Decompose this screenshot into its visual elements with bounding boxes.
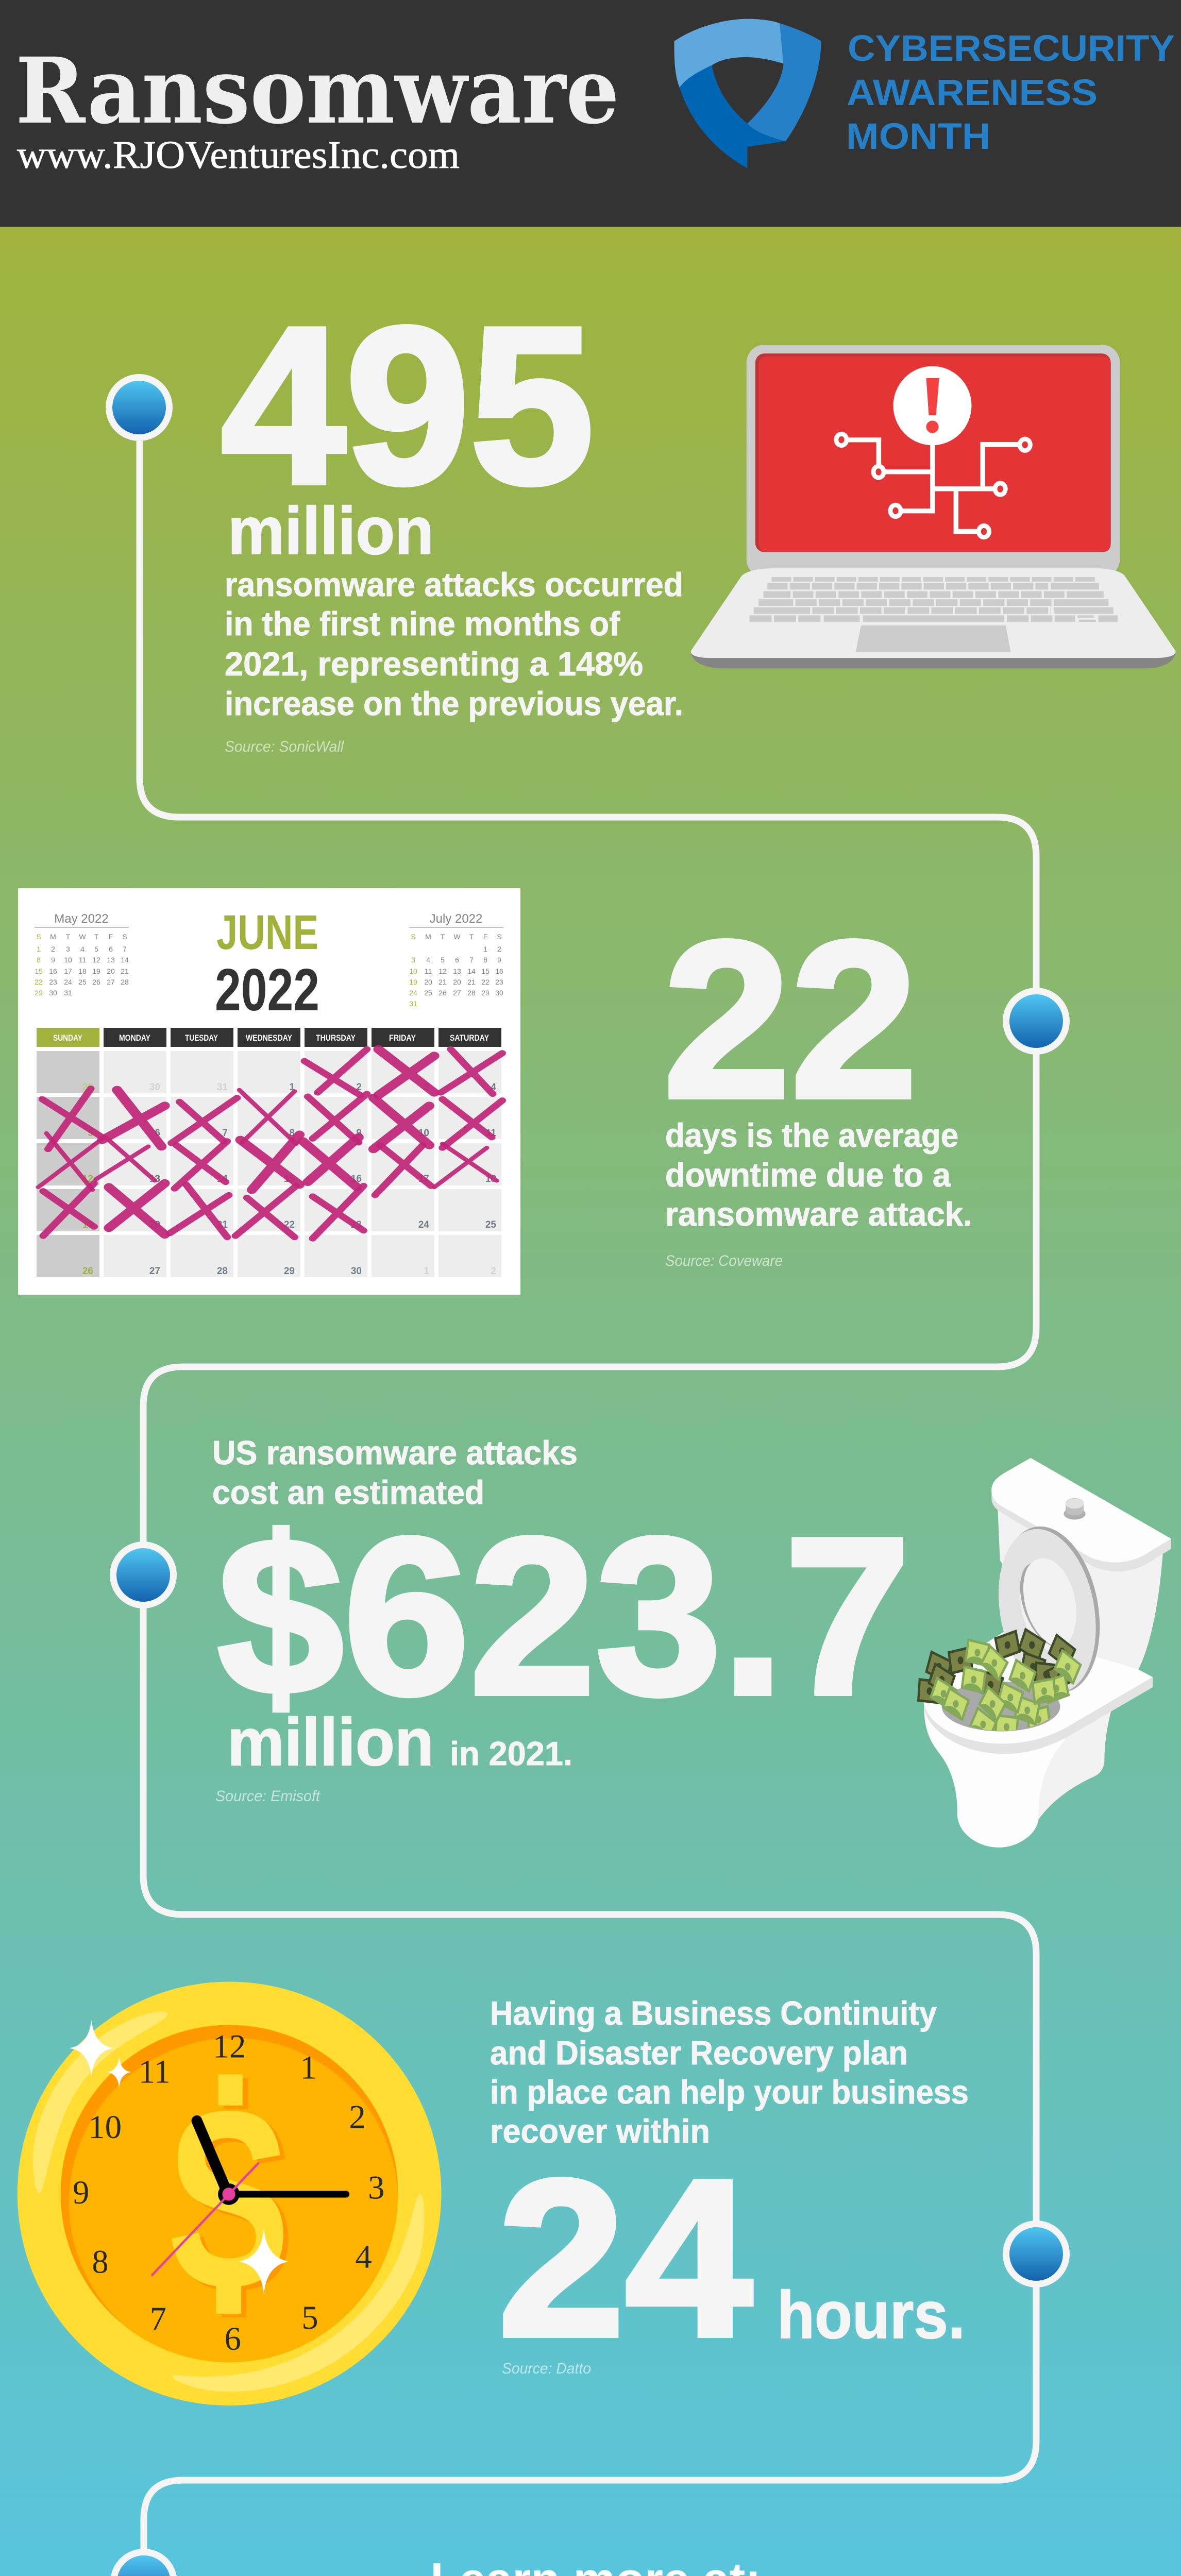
description text: downtime due to a — [665, 1156, 951, 1194]
mini calendar: May: 2 — [51, 945, 55, 953]
mini calendar: May: 12 — [92, 956, 100, 964]
day numbers: 17 — [418, 1174, 429, 1184]
day numbers: 30 — [149, 1082, 160, 1093]
clock numerals: 4 — [355, 2238, 372, 2275]
day numbers: 15 — [284, 1174, 295, 1184]
day numbers: 29 — [82, 1082, 93, 1093]
mini calendar: May: 15 — [35, 967, 43, 975]
stat number 495: 495 — [221, 280, 594, 530]
mini calendar: July: M — [425, 933, 431, 941]
source: Source: SonicWall — [225, 738, 344, 755]
mini calendar: July: 10 — [409, 967, 417, 975]
day numbers: 26 — [82, 1266, 93, 1277]
mini calendar: July: 20 — [424, 978, 432, 986]
clock numerals: 7 — [150, 2300, 166, 2337]
day numbers: 11 — [486, 1128, 496, 1139]
day numbers: 24 — [418, 1219, 429, 1230]
panel: June 2022 calendar — [18, 888, 520, 1295]
clock numerals — [73, 2027, 384, 2357]
weekday headers: THURSDAY — [316, 1033, 356, 1043]
intro text — [212, 1434, 578, 1511]
mini calendar: July: 23 — [495, 978, 503, 986]
source: Source: Emisoft — [215, 1788, 321, 1805]
source: Source: Coveware — [665, 1252, 783, 1269]
mini calendar: July: 29 — [481, 989, 490, 997]
day cells — [37, 1051, 501, 1277]
mini calendar: July — [409, 912, 503, 1008]
mini calendar: July: T — [469, 933, 474, 941]
mini calendar: May: 25 — [78, 978, 87, 986]
intro text: US ransomware attacks — [212, 1434, 578, 1471]
timeline node 1 — [106, 374, 173, 441]
mini calendar: July: W — [453, 933, 461, 941]
mini calendar: May: 24 — [64, 978, 72, 986]
description text: and Disaster Recovery plan — [490, 2034, 908, 2072]
mini calendar: May: S — [122, 933, 127, 941]
clock numerals: 9 — [73, 2174, 89, 2211]
icon: toilet full of money — [917, 1458, 1171, 1848]
mini calendar: May: S — [36, 933, 41, 941]
description text: Having a Business Continuity — [490, 1994, 937, 2032]
weekday headers: FRIDAY — [389, 1033, 416, 1043]
weekday headers: SATURDAY — [450, 1033, 490, 1043]
mini calendar: May: 21 — [121, 967, 129, 975]
mini calendar: May: 30 — [49, 989, 57, 997]
clock numerals: 12 — [213, 2027, 246, 2064]
day numbers: 2 — [356, 1082, 362, 1093]
mini calendar: May: 7 — [123, 945, 127, 953]
mini calendar: May: 14 — [121, 956, 129, 964]
mini calendar: May: 18 — [78, 967, 87, 975]
mini calendar: May: 27 — [107, 978, 115, 986]
website url: www.RJOVenturesInc.com — [17, 133, 460, 177]
mini calendar: May: 6 — [109, 945, 113, 953]
description text: recover within — [490, 2112, 710, 2150]
day numbers: 22 — [284, 1219, 295, 1230]
day numbers: 20 — [149, 1219, 160, 1230]
mini calendar: May: 22 — [35, 978, 43, 986]
day numbers: 5 — [88, 1128, 93, 1139]
in 2021 text: in 2021. — [450, 1735, 572, 1772]
mini calendar: July: 8 — [483, 956, 487, 964]
header bar — [0, 0, 1181, 227]
description text: 2021, representing a 148% — [225, 645, 643, 683]
mini calendar: May: 23 — [49, 978, 57, 986]
mini calendar: July: F — [483, 933, 487, 941]
mini calendar: May: 29 — [35, 989, 43, 997]
description text: in the first nine months of — [225, 605, 620, 642]
day numbers: 4 — [491, 1082, 496, 1093]
mini calendar: May: May 2022 — [54, 912, 109, 926]
mini calendar: July: S — [411, 933, 416, 941]
icon: laptop with alert — [691, 345, 1175, 668]
panel: 22 days downtime — [663, 894, 972, 1269]
mini calendar: May: T — [94, 933, 99, 941]
calendar title: JUNE — [216, 905, 318, 960]
mini calendar: July: 28 — [467, 989, 476, 997]
clock numerals: 8 — [92, 2243, 109, 2280]
mini calendar: July: 7 — [469, 956, 474, 964]
mini calendar: July: 21 — [467, 978, 476, 986]
mini calendar: May: 9 — [51, 956, 55, 964]
day numbers: 6 — [155, 1128, 160, 1139]
mini calendar: July: 21 — [438, 978, 447, 986]
mini calendar: May: 16 — [49, 967, 57, 975]
panel: 24 hours recovery — [490, 1994, 969, 2383]
mini calendar: May: 26 — [92, 978, 100, 986]
mini calendar: July: 31 — [409, 999, 417, 1008]
clock numerals: 3 — [368, 2169, 384, 2206]
day numbers: 14 — [217, 1174, 228, 1184]
mini calendar: July: 2 — [497, 945, 501, 953]
weekday headers: TUESDAY — [185, 1033, 218, 1043]
mini calendar: July: 6 — [455, 956, 459, 964]
title: Ransomware — [15, 38, 619, 144]
mini calendar: May: 31 — [64, 989, 72, 997]
mini calendar: July: 14 — [467, 967, 476, 975]
clock numerals: 11 — [139, 2053, 171, 2090]
mini calendar: July: 4 — [426, 956, 430, 964]
mini calendar: May: 4 — [80, 945, 85, 953]
description text — [225, 566, 683, 722]
day numbers: 3 — [424, 1082, 429, 1093]
mini calendar: May: 13 — [107, 956, 115, 964]
day numbers: 9 — [356, 1128, 362, 1139]
logo text: MONTH — [846, 116, 990, 157]
day numbers: 29 — [284, 1266, 295, 1277]
mini calendar: July: 27 — [453, 989, 461, 997]
mini calendar: May: 3 — [66, 945, 70, 953]
description text: ransomware attack. — [665, 1195, 972, 1233]
icon: shield logo — [674, 19, 821, 168]
day numbers: 23 — [351, 1219, 362, 1230]
day numbers: 13 — [149, 1174, 160, 1184]
logo text — [846, 28, 1175, 157]
mini calendar: July: 22 — [481, 978, 490, 986]
description text: in place can help your business — [490, 2073, 969, 2111]
connector path — [140, 441, 1036, 2550]
logo text: CYBERSECURITY — [848, 28, 1175, 69]
mini calendar: July: 26 — [438, 989, 447, 997]
day numbers: 27 — [149, 1266, 160, 1277]
mini calendar: July: 12 — [438, 967, 447, 975]
mini calendar: July: 3 — [411, 956, 415, 964]
intro text: cost an estimated — [212, 1473, 484, 1511]
panel: $623.7 million cost — [212, 1434, 910, 1805]
mini calendar: May: 17 — [64, 967, 72, 975]
mini calendar: May: 1 — [37, 945, 41, 953]
day numbers: 12 — [82, 1174, 93, 1184]
mini calendar: July: 11 — [425, 967, 432, 975]
mini calendar: May: 8 — [37, 956, 41, 964]
weekday headers — [37, 1028, 501, 1047]
description text: ransomware attacks occurred — [225, 566, 683, 603]
day numbers: 30 — [351, 1266, 362, 1277]
clock numerals: 10 — [88, 2108, 122, 2145]
clock numerals: 6 — [224, 2320, 241, 2357]
mini calendar: July: T — [441, 933, 445, 941]
mini calendar: July: S — [497, 933, 502, 941]
dollar sign: S — [173, 2065, 295, 2340]
sparkles — [69, 2020, 289, 2295]
day numbers: 10 — [418, 1128, 429, 1139]
mini calendar: May — [35, 912, 129, 997]
mini calendar: July: July 2022 — [430, 912, 482, 926]
mini calendar: July: 19 — [409, 978, 417, 986]
mini calendar: July: 24 — [409, 989, 417, 997]
mini calendar: July: 5 — [441, 956, 445, 964]
timeline node 2 — [1003, 988, 1070, 1055]
mini calendar: July: 13 — [453, 967, 461, 975]
panel: June 2022 calendar: 2022 — [215, 956, 319, 1023]
mini calendar: July: 20 — [453, 978, 461, 986]
crossed out days — [38, 1049, 502, 1239]
description text: increase on the previous year. — [225, 685, 683, 722]
mini calendar: May: T — [66, 933, 71, 941]
mini calendar: July: 15 — [481, 967, 490, 975]
weekday headers: MONDAY — [119, 1033, 151, 1043]
mini calendar: May: 19 — [92, 967, 100, 975]
stat unit hours: hours. — [777, 2277, 965, 2352]
mini calendar: July: 25 — [424, 989, 432, 997]
mini calendar: July: 30 — [495, 989, 503, 997]
mini calendar: May: M — [50, 933, 56, 941]
day numbers: 21 — [217, 1219, 228, 1230]
timeline node 3 — [110, 1541, 177, 1608]
mini calendar: July: 1 — [483, 945, 487, 953]
mini calendar: May: 11 — [79, 956, 86, 964]
mini calendar: July: 9 — [497, 956, 501, 964]
mini calendar: May: 10 — [64, 956, 72, 964]
clock numerals: 1 — [300, 2049, 317, 2086]
dollar sign: S — [167, 2061, 290, 2336]
icon: dollar clock — [18, 1981, 441, 2405]
mini calendar: May: 20 — [107, 967, 115, 975]
stat number 22: 22 — [663, 894, 918, 1144]
day numbers: 1 — [424, 1266, 429, 1277]
money bills — [917, 1628, 1082, 1742]
clock numerals: 5 — [301, 2299, 318, 2336]
stat number $623.7: $623.7 — [217, 1491, 910, 1741]
weekday headers: WEDNESDAY — [246, 1033, 293, 1043]
day numbers — [82, 1082, 496, 1277]
day numbers: 7 — [222, 1128, 228, 1139]
timeline node 5 — [110, 2549, 177, 2576]
description text — [490, 1994, 969, 2150]
mini calendar: May: 28 — [121, 978, 129, 986]
mini calendar: May: F — [109, 933, 113, 941]
logo text: AWARENESS — [847, 73, 1098, 113]
day numbers: 19 — [82, 1219, 93, 1230]
stat number 24: 24 — [498, 2133, 754, 2383]
day numbers: 31 — [217, 1082, 228, 1093]
day numbers: 28 — [217, 1266, 228, 1277]
clock hands — [152, 2121, 346, 2275]
stat unit million: million — [227, 1704, 434, 1780]
day numbers: 18 — [485, 1174, 496, 1184]
description text — [665, 1116, 972, 1233]
day numbers: 25 — [485, 1219, 496, 1230]
description text: days is the average — [665, 1116, 958, 1154]
stat unit million: million — [228, 493, 434, 568]
day numbers: 16 — [351, 1174, 362, 1184]
panel: 495 million attacks — [221, 280, 683, 755]
mini calendar: May: 5 — [94, 945, 98, 953]
day numbers: 8 — [289, 1128, 295, 1139]
day numbers: 2 — [491, 1266, 496, 1277]
timeline node 4 — [1003, 2221, 1070, 2287]
clock numerals: 2 — [349, 2098, 366, 2136]
source: Source: Datto — [502, 2360, 591, 2377]
mini calendar: May: W — [79, 933, 86, 941]
day numbers: 1 — [289, 1082, 295, 1093]
mini calendar: July: 16 — [495, 967, 503, 975]
weekday headers: SUNDAY — [53, 1033, 83, 1043]
